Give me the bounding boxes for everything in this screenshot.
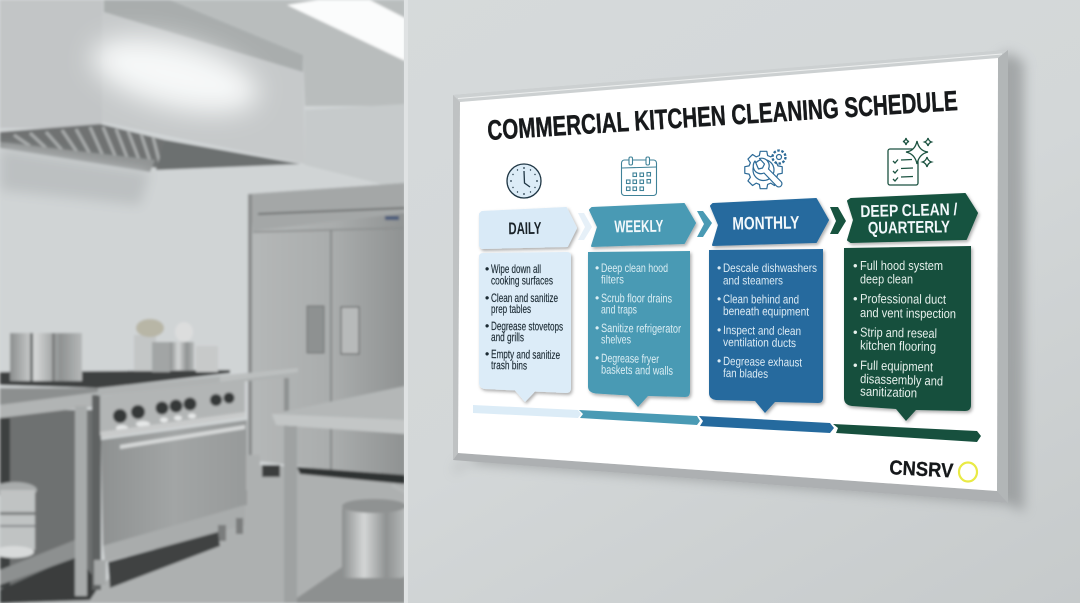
panel: weekly tasks: Deep clean hood	[601, 261, 668, 275]
panel: deep clean tasks: Full equipment	[860, 358, 934, 374]
panel: monthly tasks: ventilation ducts	[723, 335, 796, 350]
header: weekly: WEEKLY	[614, 217, 664, 236]
header: monthly: MONTHLY	[732, 212, 800, 234]
panel: weekly tasks: and traps	[601, 302, 637, 316]
panel: daily tasks: •	[485, 262, 489, 276]
panel: daily tasks: Clean and sanitize	[491, 291, 558, 305]
panel: monthly tasks	[709, 249, 823, 413]
panel: deep clean tasks: •	[853, 358, 858, 372]
panel: deep clean tasks: •	[853, 258, 858, 273]
header: monthly	[711, 199, 828, 245]
panel: weekly tasks: •	[595, 261, 599, 275]
metal frame	[453, 50, 1008, 503]
panel: deep clean tasks: •	[853, 324, 858, 340]
panel: deep clean tasks: Strip and reseal	[860, 325, 937, 341]
panel: daily tasks: cooking surfaces	[491, 274, 553, 288]
panel: weekly tasks: filters	[601, 272, 624, 286]
icon: checklist with sparkles	[888, 138, 932, 185]
panel: weekly tasks: •	[595, 291, 599, 305]
panel: deep clean tasks: disassembly and	[860, 371, 943, 389]
panel: monthly tasks: •	[717, 261, 721, 275]
panel: daily tasks: Empty and sanitize	[491, 347, 560, 362]
panel: daily tasks: and grills	[491, 330, 524, 344]
panel: weekly tasks: Scrub floor drains	[601, 291, 672, 305]
panel: daily tasks: •	[485, 291, 489, 305]
panel: deep clean tasks	[844, 246, 971, 421]
panel: daily tasks	[479, 252, 571, 402]
panel: weekly tasks: Degrease fryer	[601, 351, 659, 366]
icon: gear and wrench	[745, 150, 786, 189]
panel: monthly tasks: and steamers	[723, 274, 783, 288]
header: weekly	[590, 204, 695, 246]
panel: monthly tasks: fan blades	[723, 366, 768, 381]
panel: weekly tasks: shelves	[601, 332, 631, 346]
header: daily	[480, 208, 576, 248]
header: daily: DAILY	[508, 219, 542, 238]
panel: monthly tasks: •	[717, 354, 721, 368]
wall edge	[404, 0, 408, 603]
connector chevrons	[578, 207, 846, 240]
panel: weekly tasks: •	[595, 351, 599, 365]
panel: monthly tasks: Degrease exhaust	[723, 354, 803, 370]
kitchen photo	[0, 0, 406, 603]
poster shadow	[452, 52, 1024, 512]
panel: weekly tasks: Sanitize refrigerator	[601, 321, 681, 336]
panel: daily tasks: prep tables	[491, 302, 531, 316]
panel: monthly tasks: •	[717, 323, 721, 337]
panel: daily tasks: Wipe down all	[491, 262, 541, 276]
header: deep clean / quarterly: DEEP CLEAN /	[860, 200, 958, 221]
icon: calendar	[622, 157, 656, 196]
logo: CNSRV: CNSRV	[889, 457, 954, 483]
panel: daily tasks: •	[485, 319, 489, 333]
panel: deep clean tasks: deep clean	[860, 272, 913, 286]
header: deep clean / quarterly	[848, 194, 977, 242]
panel: monthly tasks: beneath equipment	[723, 304, 810, 319]
icon: clock	[507, 164, 541, 198]
panel: deep clean tasks: Full hood system	[860, 258, 943, 273]
header: deep clean / quarterly: QUARTERLY	[868, 217, 951, 238]
panel: daily tasks: Degrease stovetops	[491, 319, 563, 334]
panel: monthly tasks: Clean behind and	[723, 292, 799, 307]
poster	[452, 50, 1024, 512]
panel: daily tasks: •	[485, 347, 489, 361]
panel: deep clean tasks: Professional duct	[860, 291, 946, 307]
panel: weekly tasks: baskets and walls	[601, 363, 673, 378]
panel: monthly tasks: •	[717, 292, 721, 306]
white poster face	[458, 58, 998, 491]
panel: weekly tasks	[588, 251, 690, 407]
panel: daily tasks: trash bins	[491, 358, 527, 373]
panel: deep clean tasks: sanitization	[860, 384, 917, 400]
panel: deep clean tasks: and vent inspection	[860, 305, 956, 321]
panel: monthly tasks: Descale dishwashers	[723, 261, 817, 275]
panel: monthly tasks: Inspect and clean	[723, 323, 801, 338]
panel: deep clean tasks: kitchen flooring	[860, 338, 936, 354]
timeline bar	[473, 405, 981, 442]
panel: weekly tasks: •	[595, 321, 599, 335]
panel: deep clean tasks: •	[853, 291, 858, 306]
